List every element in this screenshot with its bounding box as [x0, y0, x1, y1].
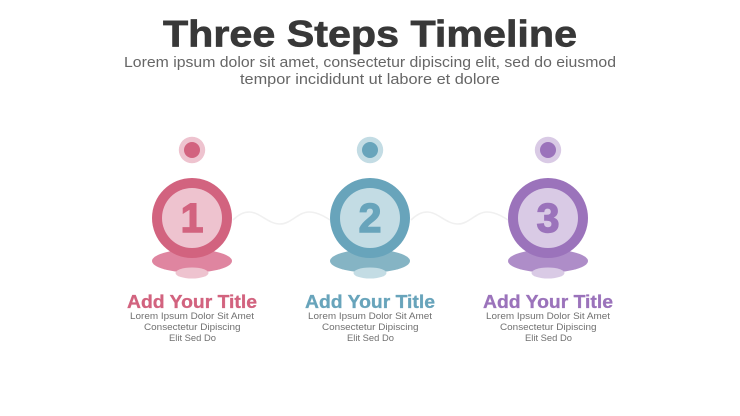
- step 2 description: [308, 311, 432, 344]
- step 2 pin base: [330, 250, 410, 278]
- subtitle: [124, 55, 616, 88]
- step 1 heading: Add Your Title: [127, 292, 257, 312]
- step 2 description: Consectetur Dipiscing: [322, 322, 418, 333]
- step 1 number badge: [152, 178, 232, 258]
- step 3: [483, 137, 613, 344]
- step 3 heading: Add Your Title: [483, 292, 613, 312]
- step 3 description: Lorem Ipsum Dolor Sit Amet: [486, 311, 610, 322]
- icon: step 2 dot: [357, 137, 383, 163]
- step 3 description: Consectetur Dipiscing: [500, 322, 596, 333]
- step 1 description: Lorem Ipsum Dolor Sit Amet: [130, 311, 254, 322]
- step 3 pin base: [508, 250, 588, 278]
- step 2: [305, 137, 435, 344]
- connector wave 1: [233, 212, 330, 224]
- icon: step 3 dot: [535, 137, 561, 163]
- connector wave 2: [411, 212, 508, 224]
- subtitle: tempor incididunt ut labore et dolore: [240, 72, 500, 88]
- step 1 description: [130, 311, 254, 344]
- step 3 description: Elit Sed Do: [525, 333, 572, 344]
- step 1 number badge: 1: [181, 195, 203, 241]
- step 2 number badge: [330, 178, 410, 258]
- icon: step 1 dot: [179, 137, 205, 163]
- step 3 number badge: 3: [537, 195, 559, 241]
- step 2 number badge: 2: [359, 195, 381, 241]
- step 2 description: Elit Sed Do: [347, 333, 394, 344]
- step 3 description: [486, 311, 610, 344]
- step 3 number badge: [508, 178, 588, 258]
- title: Three Steps Timeline: [163, 14, 577, 54]
- step 1: [127, 137, 257, 344]
- step 2 description: Lorem Ipsum Dolor Sit Amet: [308, 311, 432, 322]
- step 1 description: Consectetur Dipiscing: [144, 322, 240, 333]
- step 2 heading: Add Your Title: [305, 292, 435, 312]
- step 1 pin base: [152, 250, 232, 278]
- step 1 description: Elit Sed Do: [169, 333, 216, 344]
- subtitle: Lorem ipsum dolor sit amet, consectetur dipiscing elit, sed do eiusmod: [124, 55, 616, 71]
